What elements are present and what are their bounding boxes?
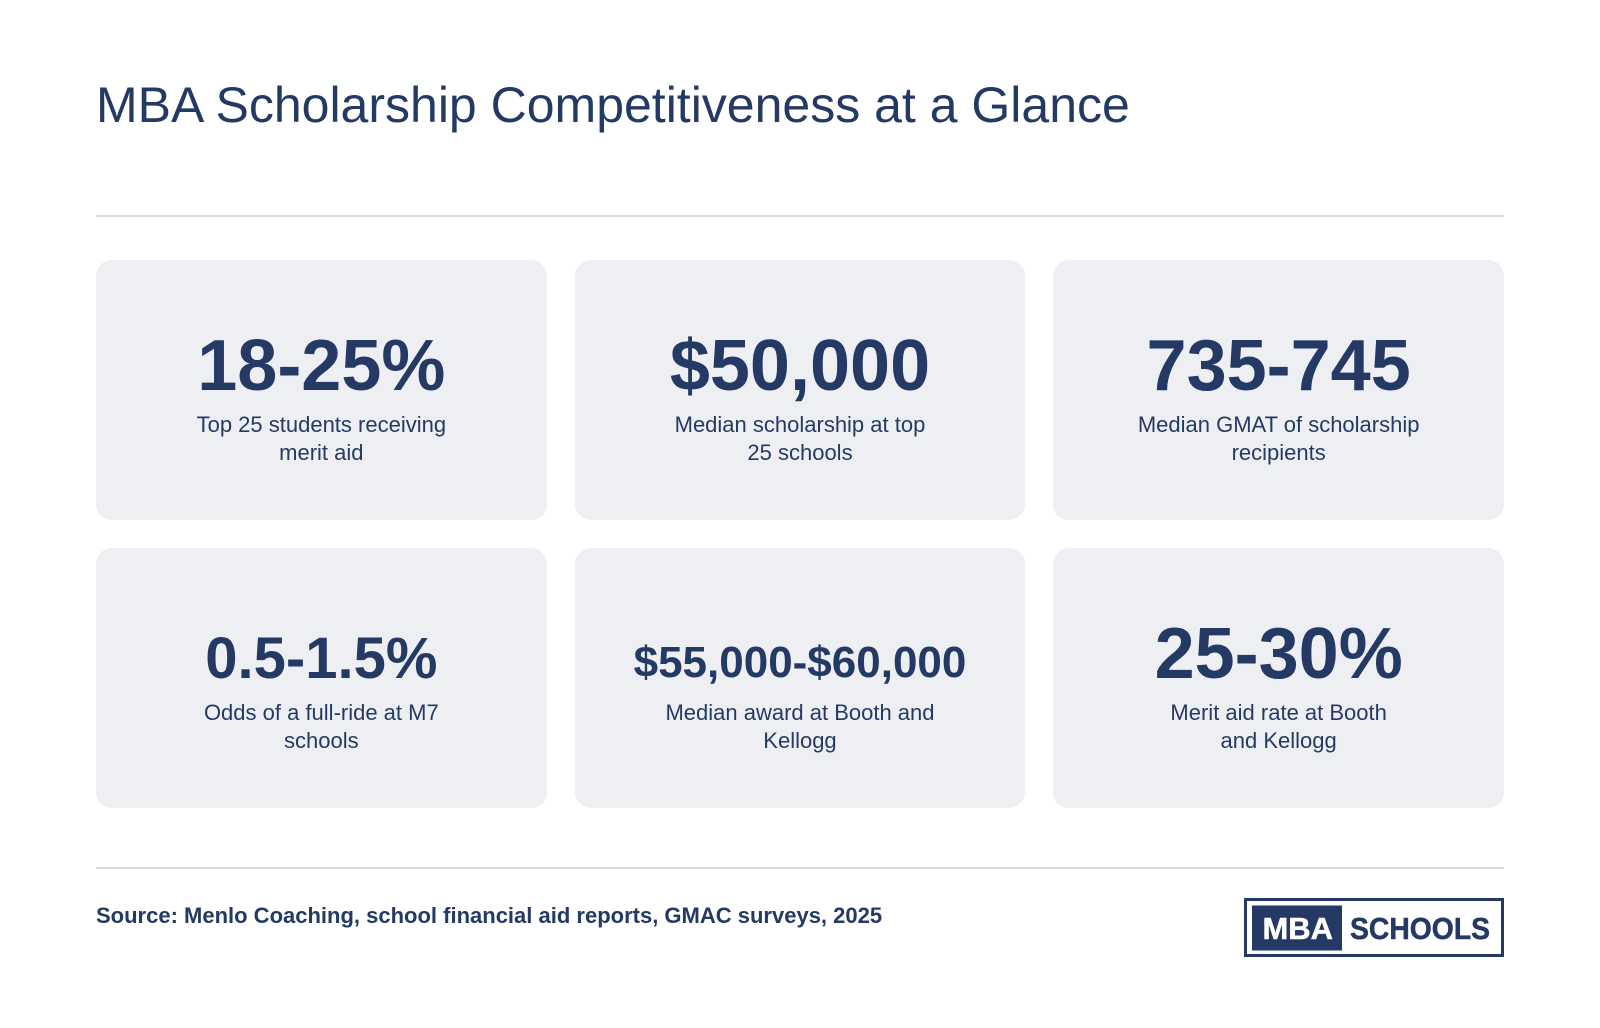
description: and Kellogg bbox=[1221, 728, 1337, 753]
description bbox=[675, 412, 925, 465]
description: Top 25 students receiving bbox=[197, 412, 446, 437]
logo: MBA Schools: MBA bbox=[1262, 912, 1333, 946]
description: recipients bbox=[1232, 440, 1326, 465]
panel: top 25 merit aid bbox=[96, 260, 547, 520]
source note: Source: Menlo Coaching, school financial aid reports, GMAC surveys, 2025 bbox=[96, 903, 882, 928]
logo: MBA Schools: SCHOOLS bbox=[1350, 912, 1490, 946]
description: Median award at Booth and bbox=[665, 700, 935, 725]
description: Merit aid rate at Booth bbox=[1170, 700, 1387, 725]
stat: $55,000-$60,000: $55,000-$60,000 bbox=[634, 638, 966, 687]
title: MBA Scholarship Competitiveness at a Glance bbox=[96, 77, 1130, 133]
stat: 25-30%: 25-30% bbox=[1155, 614, 1403, 694]
panel: median GMAT bbox=[1053, 260, 1504, 520]
description: Median scholarship at top bbox=[675, 412, 925, 437]
description: Median GMAT of scholarship bbox=[1138, 412, 1419, 437]
panel: merit aid rate bbox=[1053, 548, 1504, 808]
description: 25 schools bbox=[747, 440, 853, 465]
description bbox=[204, 700, 439, 753]
description bbox=[197, 412, 446, 465]
description bbox=[665, 700, 935, 753]
stat: $50,000: $50,000 bbox=[670, 326, 930, 406]
panel: median award Booth Kellogg bbox=[575, 548, 1025, 808]
description: schools bbox=[284, 728, 359, 753]
description: merit aid bbox=[279, 440, 364, 465]
panel: full-ride odds bbox=[96, 548, 547, 808]
stat: 0.5-1.5%: 0.5-1.5% bbox=[205, 626, 437, 691]
stat: 18-25%: 18-25% bbox=[197, 326, 445, 406]
stat: 735-745: 735-745 bbox=[1147, 326, 1411, 406]
description: Kellogg bbox=[763, 728, 837, 753]
description bbox=[1138, 412, 1419, 465]
description: Odds of a full-ride at M7 bbox=[204, 700, 439, 725]
panel: median scholarship bbox=[575, 260, 1025, 520]
description bbox=[1170, 700, 1387, 753]
logo: MBA Schools bbox=[1244, 898, 1504, 957]
